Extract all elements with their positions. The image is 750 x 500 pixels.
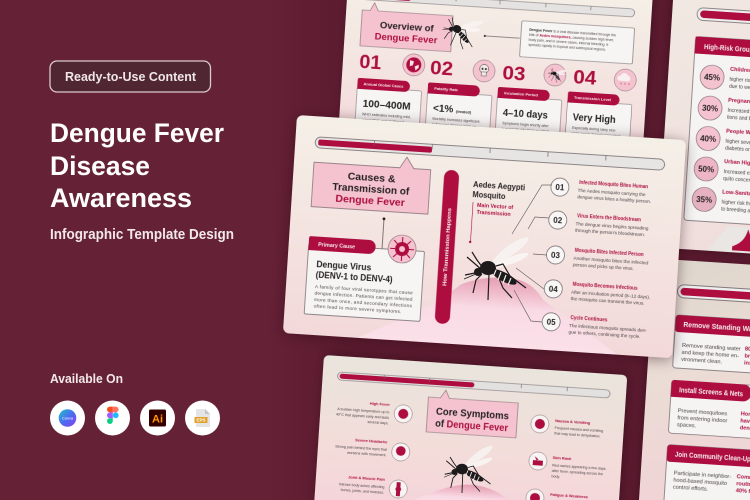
row: pregnant	[697, 95, 750, 125]
step 03: person and picks up the virus.	[573, 262, 634, 272]
step 01	[550, 178, 652, 205]
symptom: severe headache: Severe Headache	[355, 437, 388, 444]
main vector label	[469, 202, 514, 246]
main title: Dengue Fever	[50, 118, 224, 148]
icon: canva	[50, 400, 85, 436]
panel: primary cause	[304, 229, 425, 321]
icon: eps file	[185, 400, 220, 436]
icon: symptoms mosquito	[444, 446, 492, 493]
callout: overview title: Dengue Fever	[374, 31, 438, 46]
callout: causes title	[311, 151, 431, 214]
main vector label: Main Vector of	[477, 203, 514, 211]
box: remove standing water: vironment clean.	[681, 357, 723, 366]
box: install screens and nets	[668, 380, 750, 450]
callout: causes title: Transmission of	[332, 181, 410, 198]
stat: 04 transmission level: sons and in densely populated	[572, 131, 620, 138]
stat: 02 fatality rate	[424, 56, 496, 155]
progress bar	[362, 0, 635, 17]
panel: prevention slide	[638, 258, 750, 500]
progress bar	[677, 284, 750, 317]
left panel: template promo	[50, 61, 234, 436]
main vector label: Transmission	[476, 210, 511, 218]
step 05: gue to others, continuing the cycle.	[568, 329, 641, 340]
pill: how transmission happens: How Transmission Happens	[442, 208, 453, 286]
step 04: 04	[549, 285, 559, 294]
skin hill	[358, 269, 622, 355]
panel: primary cause: more than once, and secondary infections	[314, 297, 413, 308]
box: join community clean-up: hood-based mosquito	[673, 478, 727, 487]
box: join community clean-up	[664, 445, 750, 500]
callout: causes title: Dengue Fever	[335, 193, 405, 209]
step 03: Mosquito Bites Infected Person	[575, 248, 644, 258]
row: children	[699, 64, 750, 94]
available on label: Available On	[50, 371, 123, 386]
row: low sanitation: 35%	[696, 195, 712, 205]
row: urban: 50%	[698, 164, 714, 174]
stat: 01 annual global cases: 01	[359, 52, 382, 74]
symptom: nausea and vomiting	[530, 414, 604, 439]
step 02	[548, 210, 649, 238]
panel: high-risk groups slide	[657, 0, 750, 268]
step 04: After an incubation period (8–12 days),	[571, 290, 650, 301]
stat: 03 incubation period: 4–10 days	[503, 108, 549, 122]
icon: overview mosquito	[438, 8, 484, 54]
panel: primary cause: (DENV-1 to DENV-4)	[315, 270, 393, 285]
symptom: skin rash	[528, 451, 607, 482]
icon: canva: Canva	[62, 416, 74, 420]
mosquito fragment	[732, 228, 750, 252]
step 03: Another mosquito bites the infected	[573, 256, 649, 266]
progress bar	[697, 8, 750, 39]
icon: virus	[387, 234, 417, 264]
stat: 01 annual global cases: WHO estimates including mild,	[362, 112, 411, 119]
symptom: joint and muscle pain: bones, joints, and muscles.	[341, 488, 384, 495]
symptom: nausea and vomiting: Frequent nausea and vomiting	[555, 426, 603, 433]
skin hill	[394, 480, 531, 500]
symptom: high fever	[335, 398, 413, 427]
step 02: Virus Enters the Bloodstream	[577, 213, 642, 223]
stat: 02 fatality rate: <1% (treated)	[433, 103, 472, 117]
subtitle: Infographic Template Design	[50, 227, 234, 243]
panel: causes and transmission slide	[283, 115, 686, 358]
box: install screens and nets: from entering indoor	[677, 415, 728, 424]
callout: overview title: Overview of	[379, 20, 435, 35]
callout: core symptoms title: Core Symptoms	[436, 406, 509, 422]
stat: 03 incubation period: a mosquito bite from an infect-	[502, 127, 551, 134]
icon: figma	[95, 400, 130, 436]
callout: core symptoms title	[426, 389, 519, 438]
panel: primary cause: dengue infection. Patients can get infected	[314, 291, 413, 302]
step 04: Mosquito Becomes Infectious	[572, 282, 638, 292]
symptom: joint and muscle pain: Joint & Muscle Pain	[348, 474, 386, 482]
symptom: severe headache: worsens with movement.	[347, 451, 387, 457]
box: join community clean-up: Participate in neighbor-	[674, 471, 731, 480]
box: remove standing water	[673, 315, 750, 385]
box: install screens and nets: Prevent mosquitoes	[678, 408, 728, 417]
symptom: high fever: several days.	[367, 420, 389, 425]
symptom: skin rash: Skin Rash	[553, 455, 572, 461]
panel: primary cause: Primary Cause	[318, 242, 355, 251]
stat: 04 transmission level: Very High	[572, 112, 616, 126]
panel: primary cause: A family of four viral serotypes that cause	[315, 284, 413, 295]
table: high-risk groups	[684, 36, 750, 239]
pale hill decoration	[707, 225, 750, 254]
mosquito name: Aedes Aegypti	[473, 180, 525, 192]
stat: 04 transmission level: Transmission Level	[574, 95, 611, 102]
stat: 03 incubation period: Incubation Period	[504, 90, 539, 98]
panel: core symptoms slide	[314, 355, 627, 500]
step 02: through the person's bloodstream.	[575, 228, 645, 238]
stat: 01 annual global cases: Annual Global Cases	[363, 81, 404, 89]
step 04: the mosquito can transmit the virus.	[570, 296, 645, 307]
step 01: dengue virus bites a healthy person.	[577, 194, 651, 205]
row: children: 45%	[704, 73, 720, 83]
symptom: joint and muscle pain: Intense body aches affecting	[339, 482, 384, 489]
symptom: high fever: A sudden high temperature up to	[337, 407, 389, 414]
step 01: The Aedes mosquito carrying the	[578, 188, 646, 198]
description box	[520, 21, 635, 64]
row: urban	[693, 156, 750, 186]
box: remove standing water: and keep the home en-	[681, 350, 739, 360]
box: remove standing water: Remove standing water	[682, 343, 741, 353]
step 03	[546, 245, 649, 273]
stat: 04 transmission level	[564, 65, 637, 165]
symptom: nausea and vomiting: Nausea & Vomiting	[555, 418, 591, 425]
symptom: skin rash: after fever, spreading across the	[552, 469, 603, 476]
stat: 01 annual global cases: unreported, and confirmed	[362, 118, 404, 124]
stat: 03 incubation period: 03	[502, 63, 526, 86]
progress bar	[315, 137, 665, 170]
symptom: skin rash: body.	[551, 474, 560, 479]
symptom: high fever: 40°C that appears early and lasts	[336, 412, 389, 420]
step 02: The dengue virus begins spreading	[575, 221, 649, 232]
row: low sanitation	[691, 187, 750, 216]
main title: Awareness	[50, 183, 192, 213]
panel: primary cause: often lead to more severe symptoms.	[314, 303, 402, 314]
description box: Dengue Fever is a viral disease transmitted through the	[529, 28, 616, 37]
stat: 02 fatality rate: ly if severe dengue goes un-	[432, 122, 478, 129]
step 02: 02	[553, 216, 563, 225]
description box: spreads rapidly in tropical and subtropical regions.	[528, 43, 606, 52]
panel: overview slide	[337, 0, 653, 172]
leader lines: steps to mosquito	[512, 185, 552, 322]
step 01: Infected Mosquito Bites Human	[579, 180, 648, 190]
stat: 03 incubation period	[494, 60, 567, 160]
step 03: 03	[551, 251, 561, 260]
symptom: fatigue and weakness: Fatigue & Weakness	[550, 492, 588, 499]
icon: adobe illustrator	[140, 400, 175, 436]
stat: 02 fatality rate: Fatality Rate	[434, 86, 459, 92]
stat: 01 annual global cases	[353, 50, 425, 151]
leader line	[485, 36, 520, 38]
step 05: The infectious mosquito spreads den-	[569, 323, 647, 334]
badge: ready-to-use content	[50, 61, 210, 92]
stat: 02 fatality rate: 02	[429, 58, 454, 80]
callout: causes title: Causes &	[347, 170, 396, 186]
main title	[50, 118, 224, 213]
description box: body pain, and in severe cases, internal bleeding. It	[529, 38, 608, 47]
stat: 03 incubation period: Symptoms begin shortly after	[502, 121, 550, 128]
badge: ready-to-use content: Ready-to-Use Content	[65, 69, 197, 84]
symptom: joint and muscle pain	[338, 474, 408, 499]
main title: Disease	[50, 151, 150, 181]
symptom: severe headache: Strong pain behind the eyes that	[335, 444, 387, 452]
progress bar	[337, 372, 610, 398]
symptom: high fever: High Fever	[370, 401, 391, 407]
row: people with diabetes: 40%	[700, 134, 716, 144]
panel: primary cause: Dengue Virus	[316, 259, 372, 273]
row: people with diabetes	[695, 126, 750, 156]
symptom: skin rash: Red rashes appearing a few days	[552, 463, 606, 471]
icon: eps file: EPS	[196, 418, 206, 423]
icon: large mosquito	[464, 237, 528, 300]
step 01: 01	[555, 183, 565, 192]
pill: how transmission happens	[435, 170, 459, 324]
symptom: fatigue and weakness	[525, 488, 588, 500]
mosquito name: Mosquito	[472, 190, 506, 201]
leader line	[382, 219, 384, 249]
step 05	[541, 312, 648, 341]
description box: bite of Aedes mosquitoes, causing sudden high fever,	[529, 33, 614, 42]
step 05: Cycle Continues	[570, 315, 608, 323]
stat: 01 annual global cases: 100–400M	[362, 99, 411, 113]
stat: 02 fatality rate: Mortality increases significant-	[432, 117, 481, 124]
box: install screens and nets: spaces.	[677, 422, 697, 429]
row: pregnant: 30%	[702, 104, 718, 114]
icon: adobe illustrator: Ai	[152, 414, 163, 426]
step 05: 05	[546, 318, 556, 327]
box: join community clean-up: control efforts.	[673, 485, 709, 493]
callout: core symptoms title: of Dengue Fever	[435, 418, 508, 434]
symptom: severe headache	[335, 436, 410, 462]
stat: 04 transmission level: Especially during rainy sea-	[572, 126, 617, 133]
symptom: nausea and vomiting: that may lead to dehydration.	[554, 431, 601, 439]
callout: overview title	[360, 2, 454, 52]
step 04	[544, 279, 651, 307]
stat: 04 transmission level: 04	[573, 67, 597, 90]
mosquito name	[472, 180, 525, 202]
